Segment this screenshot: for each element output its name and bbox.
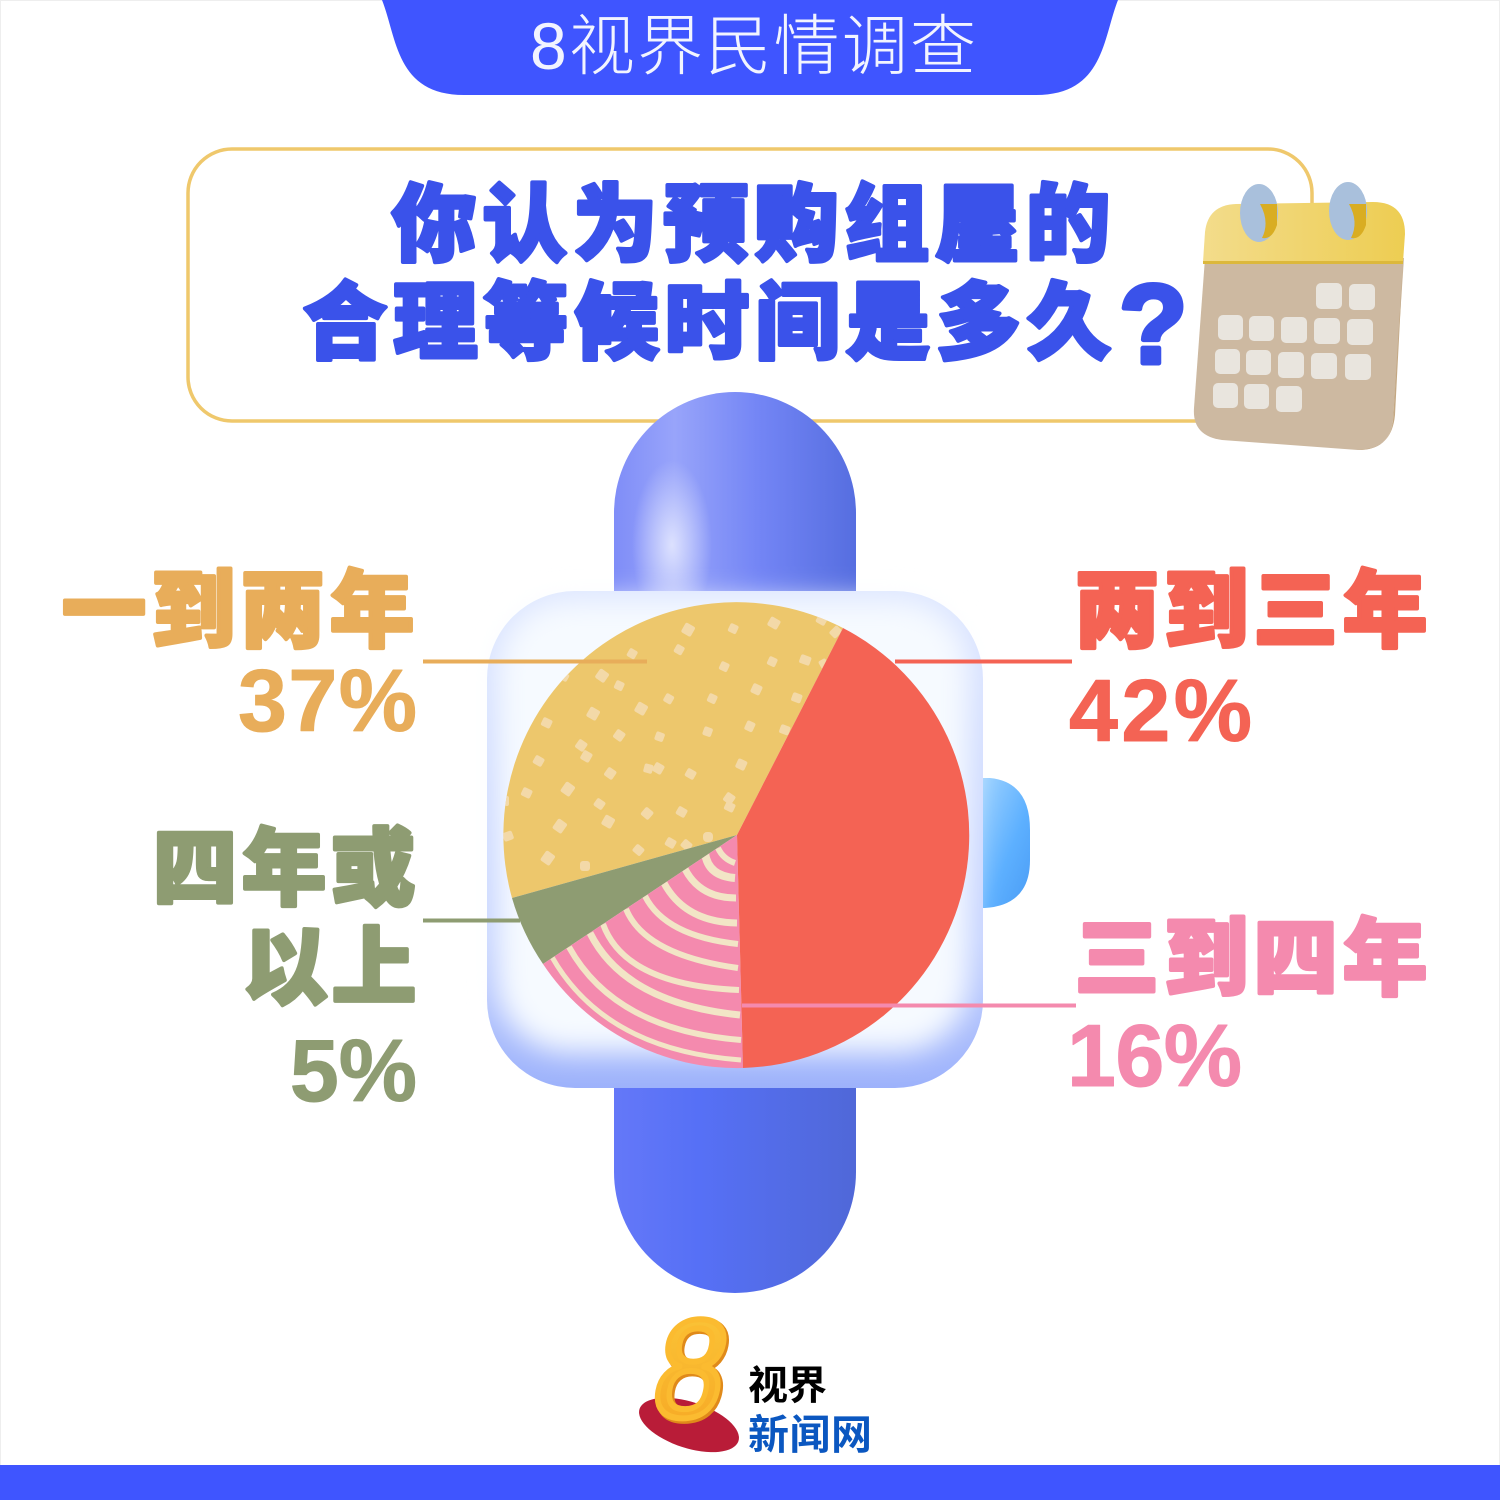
logo: 8 视界新闻网: [632, 1291, 872, 1463]
label: two to three years 42%: 42%: [1069, 661, 1252, 760]
label: three to four years 16%: 16%: [1067, 1006, 1242, 1105]
watch strap: bottom: [614, 1080, 856, 1293]
pie slice: one to two years 37%: [502, 602, 843, 898]
question frame: [188, 149, 1312, 421]
logo mark: 8: [643, 1291, 740, 1447]
label: three to four years 16%: [742, 912, 1427, 1105]
label: four years or more 5%: 5%: [290, 1021, 417, 1120]
label: one to two years 37%: [62, 564, 647, 750]
header banner: [382, 0, 1118, 95]
label: one to two years 37%: 37%: [238, 651, 417, 750]
watch body: [487, 392, 1030, 1293]
watch strap: top: [614, 392, 856, 630]
logo text: [748, 1364, 872, 1458]
icon: calendar: [1194, 182, 1405, 450]
header title: 8视界民情调查: [530, 9, 976, 83]
question title: 你认为预购组屋的: [392, 178, 1110, 272]
label: four years or more 5%: 四年或: [153, 822, 415, 916]
label: two to three years 42%: [895, 564, 1427, 760]
footer bar: [0, 1465, 1500, 1500]
watch case: [487, 591, 983, 1088]
label: four years or more 5%: [153, 822, 520, 1120]
logo text: 视界: [748, 1364, 827, 1408]
question title: 合理等候时间是多久: [303, 276, 1111, 370]
watch crown: [975, 778, 1030, 908]
label: two to three years 42%: 两到三年: [1075, 564, 1427, 658]
question title: ?: [1119, 262, 1187, 387]
label: three to four years 16%: 三到四年: [1075, 912, 1427, 1006]
label: one to two years 37%: 一到两年: [62, 564, 414, 658]
pie slice: three to four years 16%: [543, 835, 743, 1068]
label: four years or more 5%: 以上: [243, 921, 416, 1015]
logo mark: 8: [645, 1293, 742, 1449]
question title: [303, 178, 1187, 387]
pie slice: four years or more 5%: [512, 835, 737, 964]
pie slice: two to three years 42%: [737, 628, 969, 1068]
logo text: 新闻网: [748, 1412, 872, 1458]
pie chart: [502, 602, 969, 1068]
